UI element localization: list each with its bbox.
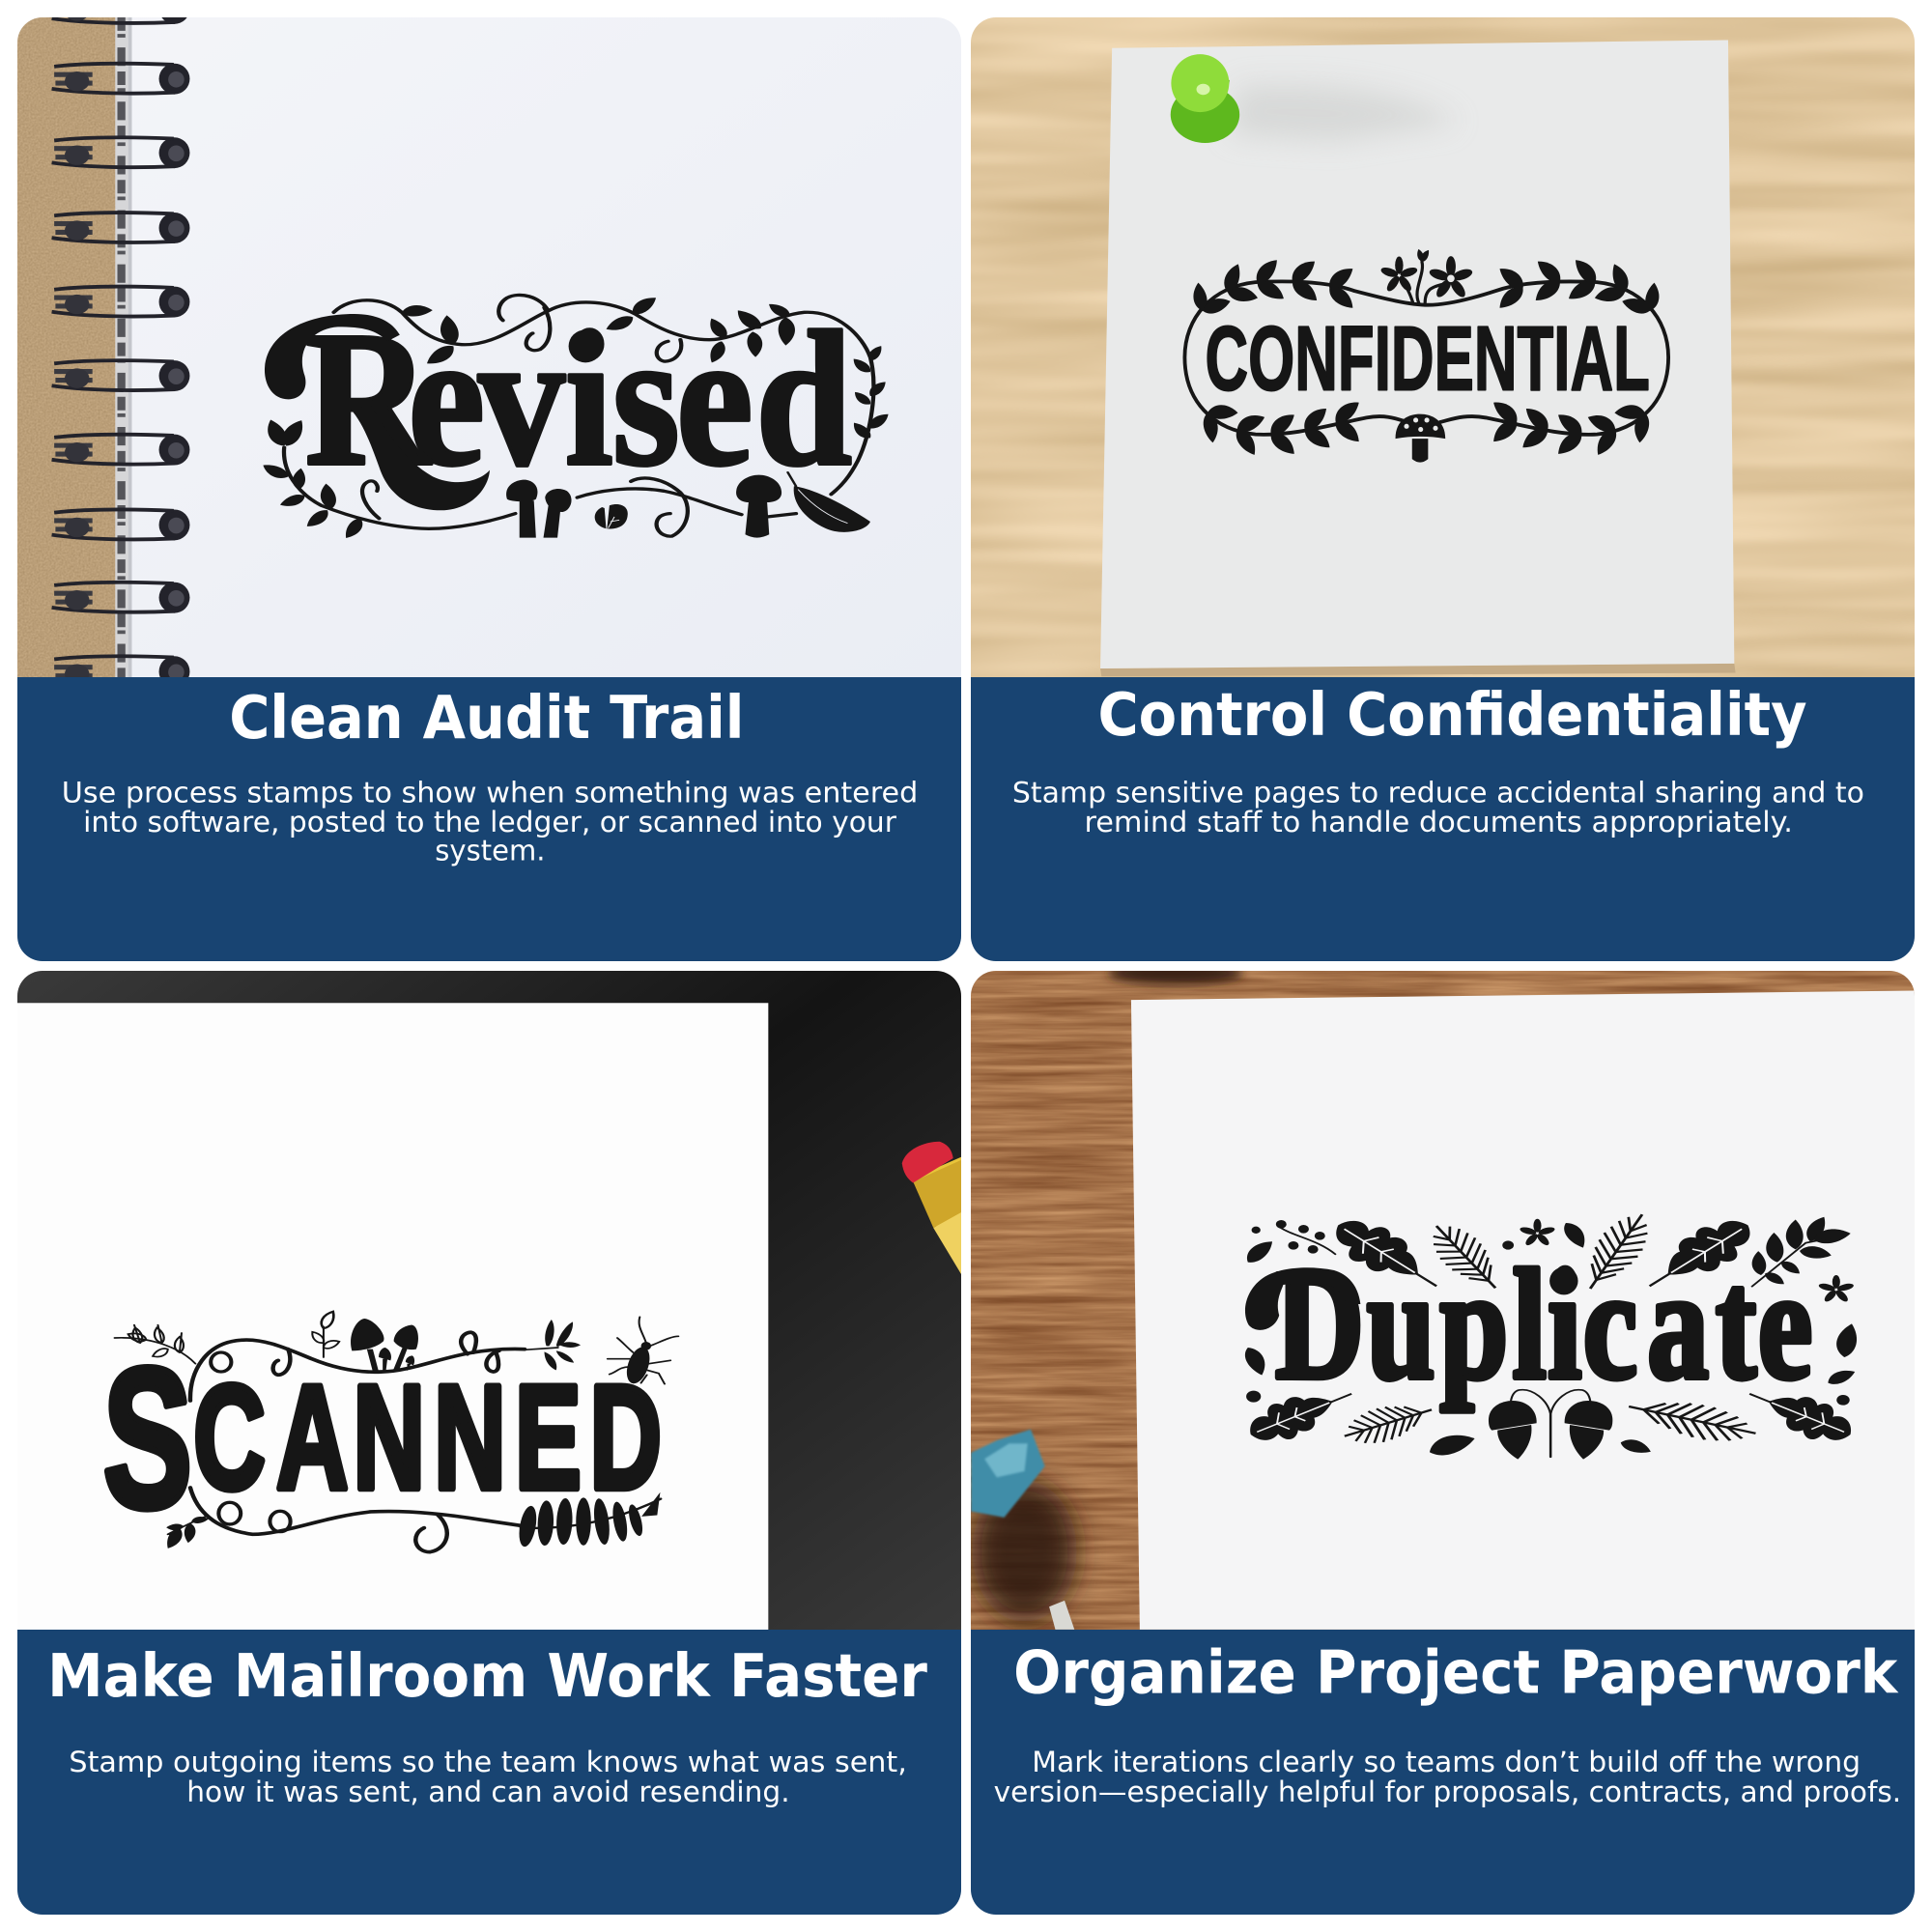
- heading: Make Mailroom Work Faster: Make Mailroom Work Faster: [47, 1642, 928, 1711]
- panel: organize project paperwork: [971, 962, 1915, 1915]
- panel: control confidentiality: [971, 17, 1915, 961]
- body: mark iterations: version—especially helpful for proposals, contracts, and proofs.: [994, 1776, 1901, 1808]
- photo: spiral notebook paper: [17, 0, 961, 687]
- caption text: [1012, 681, 1864, 838]
- stamp: Confidential: CONFIDENTIAL: [1205, 309, 1650, 411]
- body: outgoing items: how it was sent, and can avoid resending.: [186, 1776, 790, 1808]
- heading: Organize Project Paperwork: Organize Project Paperwork: [1013, 1639, 1899, 1708]
- stamp: Duplicate: Duplicate: [1275, 1236, 1812, 1412]
- body: outgoing items: Stamp outgoing items so the team knows what was sent,: [69, 1746, 907, 1778]
- panel: make mailroom work faster: [17, 971, 961, 1915]
- body: sensitive pages: [1012, 776, 1864, 838]
- caption text: [47, 1642, 928, 1808]
- stamp: Duplicate: [1239, 1206, 1861, 1460]
- heading: Clean Audit Trail: Clean Audit Trail: [229, 684, 744, 753]
- body: process stamps: [62, 776, 918, 867]
- caption panel: [971, 1630, 1915, 1915]
- photo: paper on brown wood desk: [971, 962, 1915, 1637]
- body: sensitive pages: remind staff to handle documents appropriately.: [1084, 806, 1793, 838]
- caption panel: [971, 677, 1915, 961]
- stamp: Confidential: [1179, 248, 1672, 463]
- stamp: Revised: Revised: [305, 293, 852, 506]
- caption text: [62, 684, 918, 867]
- body: process stamps: into software, posted to the ledger, or scanned into your: [83, 806, 897, 838]
- caption panel: [17, 677, 961, 961]
- panel: clean audit trail: [17, 0, 961, 961]
- photo: note pinned on wood: [971, 17, 1915, 684]
- body: process stamps: system.: [435, 834, 545, 867]
- body: mark iterations: [994, 1746, 1901, 1808]
- body: sensitive pages: Stamp sensitive pages to reduce accidental sharing and to: [1012, 776, 1864, 809]
- stamp: Scanned: S: [102, 1328, 192, 1550]
- stamp: Scanned: [102, 1310, 678, 1552]
- caption text: [994, 1639, 1901, 1808]
- stamp: Scanned: CANNED: [193, 1354, 662, 1520]
- body: mark iterations: Mark iterations clearly so teams don’t build off the wrong: [1032, 1746, 1861, 1778]
- photo: white sheet on dark desk with pencil: [17, 971, 961, 1637]
- body: outgoing items: [69, 1746, 907, 1808]
- heading: Control Confidentiality: Control Confidentiality: [1097, 681, 1807, 750]
- caption panel: [17, 1630, 961, 1915]
- body: process stamps: Use process stamps to show when something was entered: [62, 776, 918, 809]
